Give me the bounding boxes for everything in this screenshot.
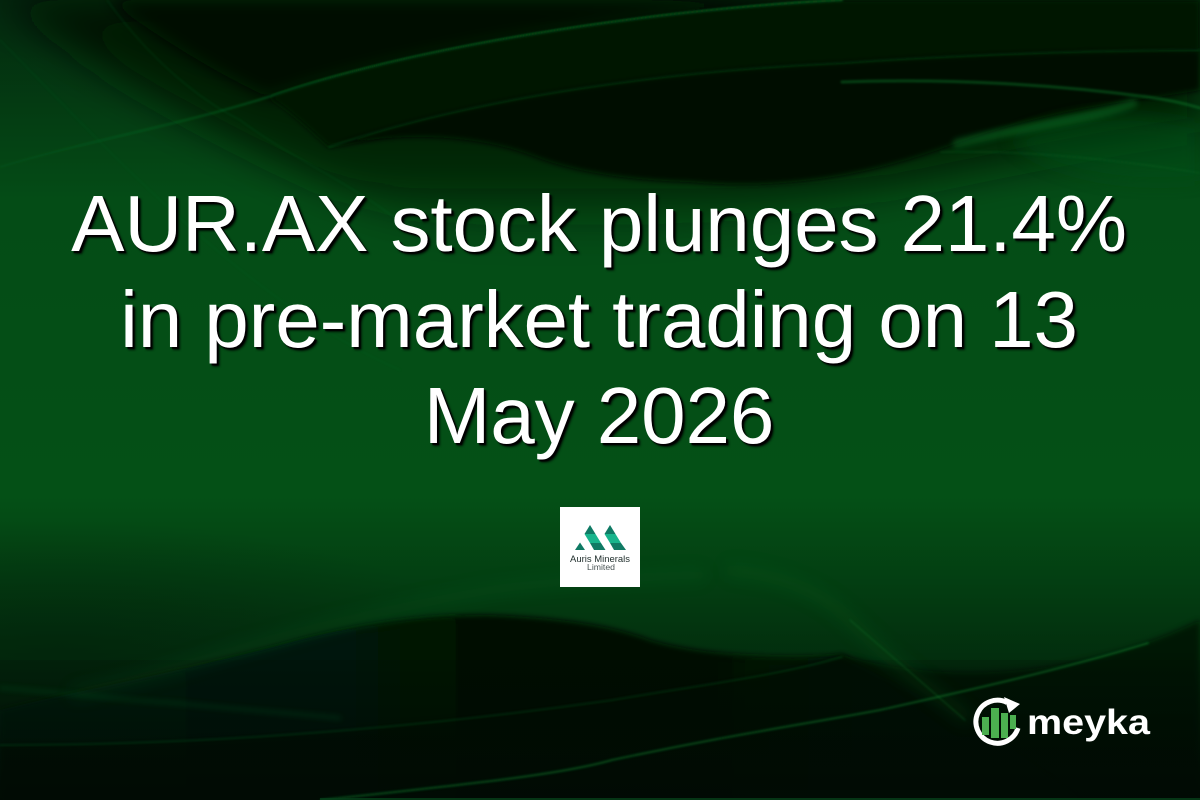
icon: circular arrow with bars [976,697,1020,743]
title: in pre-market trading on 13 [120,275,1078,364]
title [71,179,1128,464]
logo wordmark: Auris Minerals [570,554,630,565]
icon: triangular peaks [575,525,626,550]
title: May 2026 [424,371,774,460]
brand: meyka logo [973,697,1151,746]
logo sub-wordmark: Limited [587,563,615,572]
title: AUR.AX stock plunges 21.4% [71,179,1127,268]
wordmark: meyka [1027,703,1151,742]
company logo: Auris Minerals Limited [560,507,640,587]
